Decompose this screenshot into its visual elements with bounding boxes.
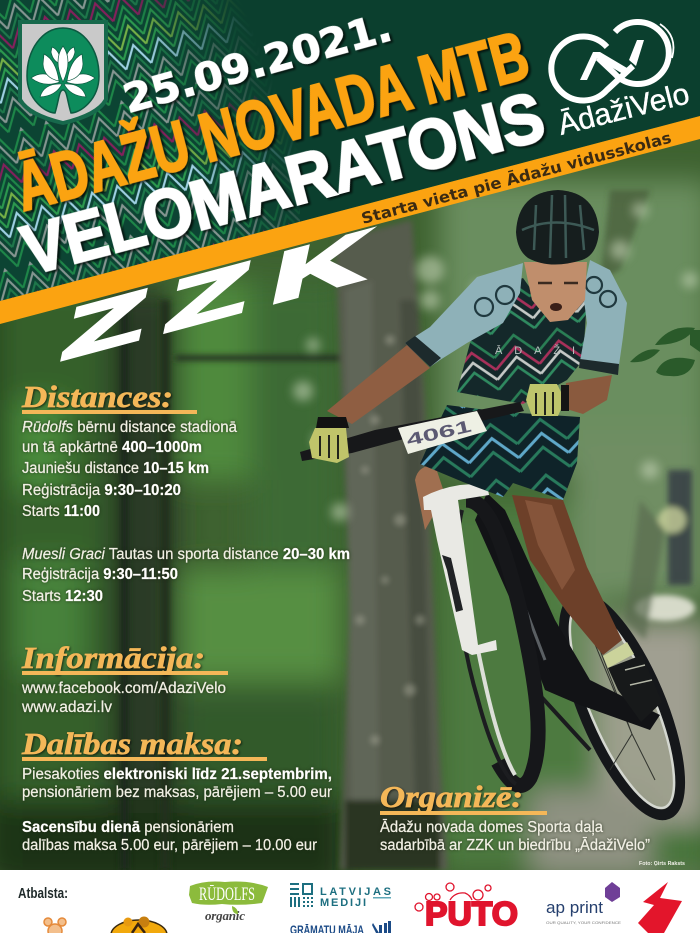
- line: Jauniešu distance 10–15 km: [22, 460, 209, 477]
- Puto logo: PUTO: [425, 895, 518, 932]
- fork: [423, 483, 497, 655]
- line: Muesli Graci Tautas un sporta distance 20–30 km: [22, 546, 350, 563]
- shorts: [420, 405, 580, 500]
- helmet: [516, 190, 599, 265]
- Rūdolfs logo: organic: [205, 908, 245, 923]
- orange ribbon: [0, 116, 700, 324]
- right arm: [563, 375, 612, 414]
- line: Piesakoties elektroniski līdz 21.septembrim,: [22, 766, 332, 783]
- heading: Distances:: [21, 379, 173, 414]
- heading: Organizē:: [380, 779, 523, 814]
- jersey text: ĀDAŽI: [495, 344, 575, 357]
- jersey torso: [457, 278, 587, 404]
- rear wheel: [541, 583, 700, 829]
- line: Sacensību dienā pensionāriem: [22, 819, 234, 836]
- Latvijas Mediji logo: MEDIJI: [320, 897, 366, 909]
- left sleeve: [405, 263, 523, 367]
- lion logo: [111, 916, 167, 933]
- frame: [475, 493, 660, 730]
- ap print logo: ap print: [546, 898, 603, 917]
- number plate: [398, 411, 487, 454]
- sleeve logos: [475, 277, 616, 316]
- section: distances: [21, 379, 350, 605]
- section: information: [21, 640, 228, 716]
- Rūdolfs logo: [189, 882, 268, 923]
- line: Reģistrācija 9:30–11:50: [22, 566, 178, 583]
- date: 25.09.2021.: [119, 6, 397, 123]
- sponsors strip: [0, 870, 700, 933]
- title line 2: VELOMARATONS: [14, 77, 552, 290]
- sock: [603, 642, 634, 668]
- line: sadarbībā ar ZZK un biedrību „ĀdažiVelo”: [380, 837, 650, 854]
- line: Rūdolfs bērnu distance stadionā: [22, 419, 237, 436]
- heading: Informācija:: [21, 640, 205, 675]
- number plate: 4061: [405, 417, 473, 450]
- section: organisers: [380, 779, 650, 854]
- ap print logo: OUR QUALITY, YOUR CONFIDENCE: [546, 920, 621, 925]
- cyclist and bicycle: [300, 190, 700, 829]
- line: pensionāriem bez maksas, pārējiem – 5.00 eur: [22, 784, 332, 801]
- glove left: [309, 417, 349, 463]
- sponsors label: Atbalsta:: [18, 885, 68, 902]
- line: Starts 12:30: [22, 588, 103, 605]
- municipal coat of arms: [18, 20, 108, 125]
- photo credit: Foto: Ģirts Raksts: [639, 861, 685, 867]
- shoe: [608, 655, 662, 722]
- AdažiVelo logo: [550, 22, 693, 142]
- Puto logo: [415, 883, 518, 932]
- handlebar: [300, 402, 524, 461]
- left arm: [327, 345, 430, 424]
- neck and face: [524, 262, 587, 322]
- top banner: [0, 0, 700, 301]
- line: un tā apkārtnē 400–1000m: [22, 439, 202, 456]
- line: Ādažu novada domes Sporta daļa: [380, 819, 603, 836]
- links: www.adazi.lv: [21, 699, 112, 716]
- rider leg: [512, 495, 622, 655]
- Specialized S logo: [638, 882, 682, 933]
- line: dalības maksa 5.00 eur, pārējiem – 10.00 eur: [22, 837, 317, 854]
- logo wordmark: ĀdažiVelo: [555, 77, 693, 142]
- line: Reģistrācija 9:30–10:20: [22, 482, 181, 499]
- links: www.facebook.com/AdaziVelo: [21, 680, 226, 697]
- Rūdolfs logo: RŪDOLFS: [199, 884, 255, 905]
- ribbon text: Starta vieta pie Ādažu vidusskolas: [359, 127, 673, 228]
- right sleeve: [580, 260, 627, 372]
- heading: Dalības maksa:: [21, 726, 243, 761]
- bear logo: [44, 918, 66, 933]
- folk zigzag pattern: [0, 0, 300, 301]
- tree trunk: [120, 190, 695, 870]
- line: Starts 11:00: [22, 503, 100, 520]
- ZZK logo: ZZK: [57, 214, 376, 376]
- Latvijas Mediji logo: [290, 883, 391, 909]
- leaves: [630, 327, 700, 376]
- glove right: [526, 384, 569, 416]
- Latvijas Mediji logo: LATVIJAS: [320, 886, 391, 898]
- section: participation fee: [21, 726, 332, 854]
- ap print logo: [546, 882, 621, 925]
- front wheel: [457, 500, 538, 785]
